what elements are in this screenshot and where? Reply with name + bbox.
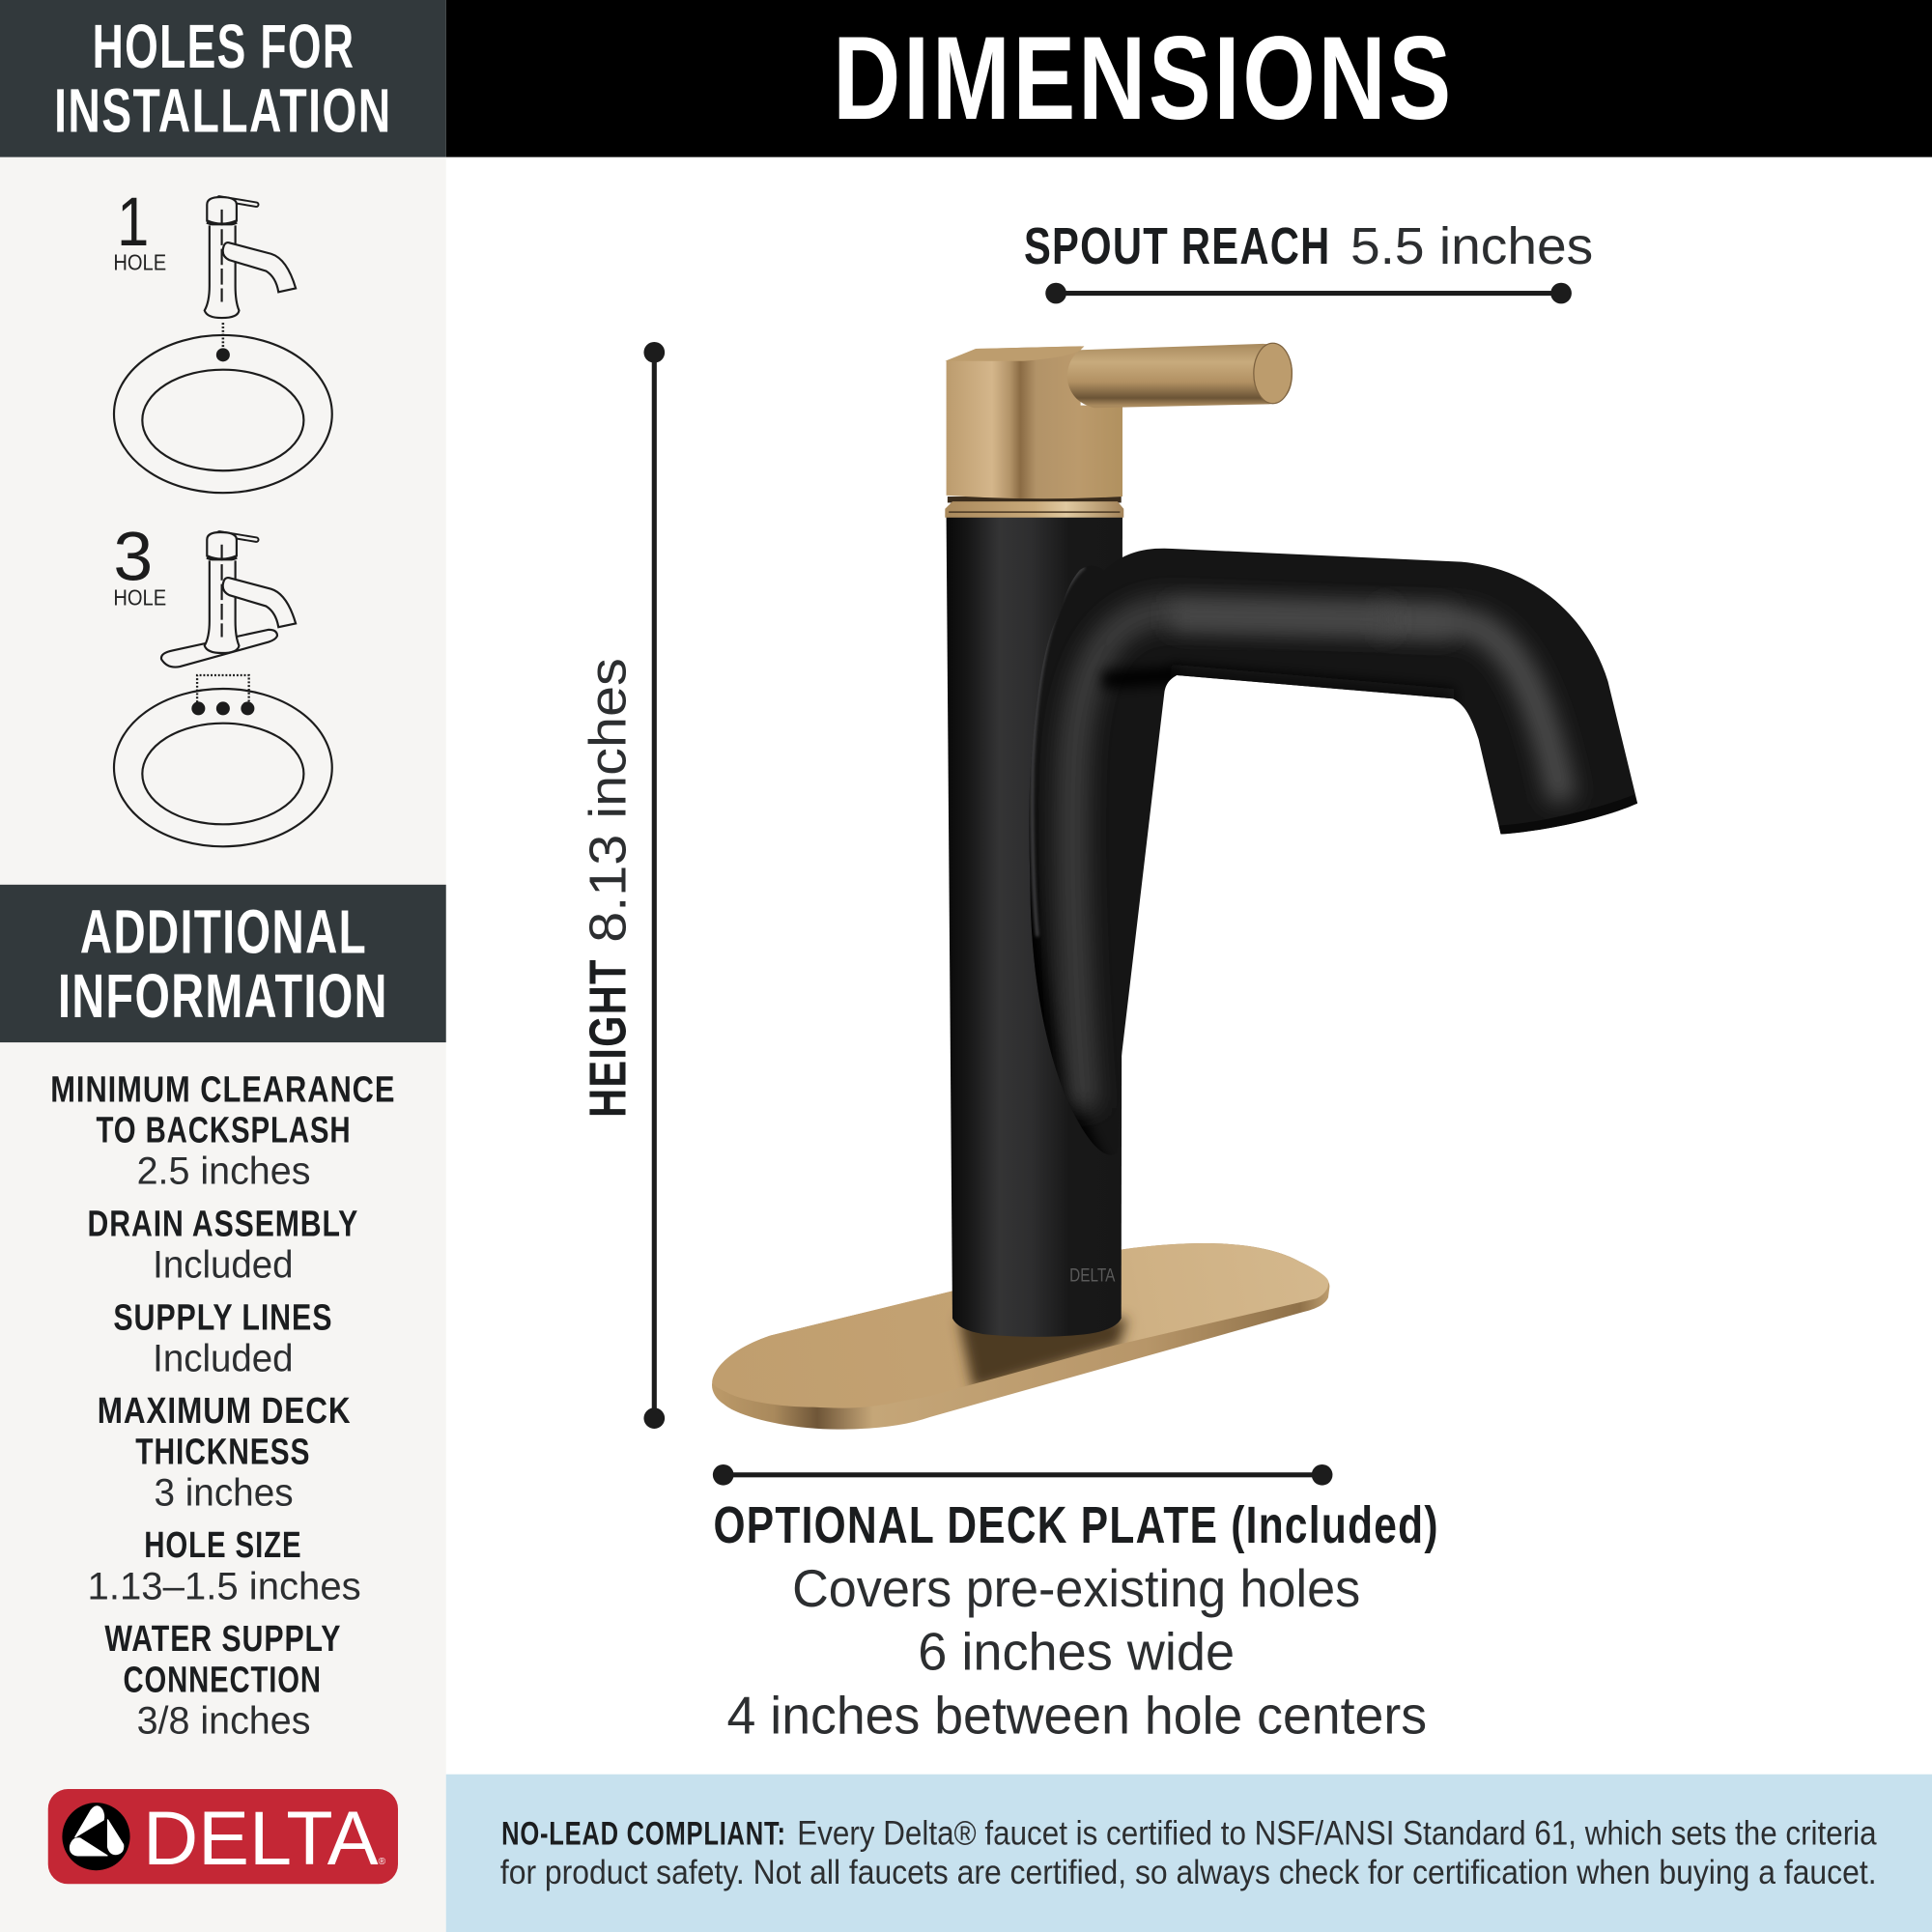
dimension: optional deck plate: Covers pre-existing holes xyxy=(792,1558,1360,1618)
faucet body xyxy=(947,516,1122,1337)
panel: 3 hole installation xyxy=(113,519,332,846)
spec: supply lines: SUPPLY LINES xyxy=(113,1296,332,1338)
spec: supply lines xyxy=(113,1296,332,1380)
spec: maximum deck thickness: MAXIMUM DECK xyxy=(98,1390,352,1432)
callout: no-lead compliant xyxy=(446,1775,1932,1932)
heading: holes for installation: INSTALLATION xyxy=(54,75,392,145)
logo: delta xyxy=(48,1789,398,1884)
spec: drain assembly: DRAIN ASSEMBLY xyxy=(88,1203,358,1244)
icon: three hole sink xyxy=(114,689,332,846)
spout and neck xyxy=(1029,549,1637,1153)
title bar: dimensions xyxy=(446,0,1932,157)
panel: 1 hole installation: HOLE xyxy=(113,249,166,274)
icon: delta triangle mark xyxy=(62,1803,130,1870)
logo: delta: DELTA xyxy=(143,1795,379,1881)
spec: water supply connection xyxy=(104,1618,341,1743)
spec: supply lines: Included xyxy=(153,1338,294,1380)
spec: minimum clearance: 2.5 inches xyxy=(137,1151,310,1193)
title bar: dimensions: DIMENSIONS xyxy=(833,12,1454,144)
spec: hole size: HOLE SIZE xyxy=(144,1524,301,1566)
spec: hole size: 1.13–1.5 inches xyxy=(88,1566,361,1608)
icon: three hole faucet with deck plate xyxy=(161,532,296,702)
gold collar ring xyxy=(945,497,1123,518)
spec: minimum clearance xyxy=(50,1068,395,1193)
spec: water supply connection: WATER SUPPLY xyxy=(104,1618,341,1660)
spec: water supply connection: 3/8 inches xyxy=(137,1700,310,1743)
spec: maximum deck thickness xyxy=(98,1390,352,1515)
text block: additional information list xyxy=(50,1068,395,1743)
icon: one hole sink xyxy=(114,335,332,493)
deck plate xyxy=(712,1243,1329,1430)
sidebar background xyxy=(0,0,446,1932)
spec: minimum clearance: MINIMUM CLEARANCE xyxy=(50,1068,395,1110)
heading: holes for installation xyxy=(0,0,446,157)
faucet body: DELTA xyxy=(1069,1266,1116,1287)
panel: 1 hole installation: 1 xyxy=(117,184,149,261)
heading: additional information: ADDITIONAL xyxy=(80,897,367,967)
heading: additional information: INFORMATION xyxy=(58,961,388,1031)
spec: minimum clearance: TO BACKSPLASH xyxy=(96,1109,352,1151)
logo: delta: ® xyxy=(379,1857,386,1867)
spec: water supply connection: CONNECTION xyxy=(124,1659,322,1700)
spec: drain assembly: Included xyxy=(153,1244,294,1287)
heading: holes for installation: HOLES FOR xyxy=(93,12,355,81)
panel: 1 hole installation xyxy=(113,184,332,493)
spec: drain assembly xyxy=(88,1203,358,1287)
panel: 3 hole installation: HOLE xyxy=(113,584,166,610)
dimension: spout reach xyxy=(1024,218,1593,303)
spec: maximum deck thickness: 3 inches xyxy=(154,1472,294,1515)
dimension: height xyxy=(580,342,665,1429)
callout: no-lead compliant: NO-LEAD COMPLIANT: xyxy=(501,1815,786,1852)
dimension: optional deck plate: OPTIONAL DECK PLATE (Included) xyxy=(714,1497,1439,1554)
dimension: spout reach: 5.5 inches xyxy=(1350,218,1593,275)
product image: faucet xyxy=(712,343,1651,1430)
gold handle xyxy=(945,343,1293,498)
icon: one hole faucet xyxy=(205,197,296,350)
dimension: optional deck plate: 6 inches wide xyxy=(918,1621,1235,1681)
spec: hole size xyxy=(88,1524,361,1608)
dimension: height: HEIGHT xyxy=(580,958,637,1118)
spec: maximum deck thickness: THICKNESS xyxy=(135,1431,310,1472)
dimension: height: 8.13 inches xyxy=(580,658,637,943)
dimension: spout reach: SPOUT REACH xyxy=(1024,218,1331,275)
panel: 3 hole installation: 3 xyxy=(113,519,153,596)
dimension: optional deck plate: 4 inches between hole centers xyxy=(727,1686,1427,1746)
heading: additional information xyxy=(0,885,446,1042)
dimension: optional deck plate xyxy=(713,1464,1439,1746)
